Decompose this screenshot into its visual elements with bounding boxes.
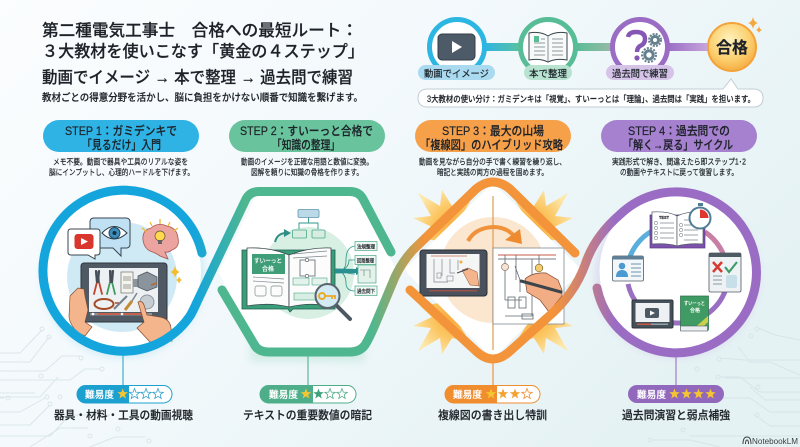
backdrop circle — [440, 217, 546, 323]
callout — [418, 79, 763, 107]
step 4 description: 実践形式で解き、間違えたら即ステップ1･2 — [612, 156, 746, 166]
badge step 4 — [628, 385, 724, 403]
icon: play speech bubble — [68, 229, 100, 259]
curved arrow — [468, 227, 522, 244]
step 4 heading: STEP 4：過去問での — [628, 123, 730, 138]
step descriptions — [49, 156, 746, 177]
tablet — [81, 263, 167, 322]
title block: 教材ごとの得意分野を活かし、脳に負担をかけない順番で知識を繋げます。 — [42, 91, 363, 104]
profile card — [612, 256, 644, 281]
label: past exams: 過去問で練習 — [612, 67, 668, 80]
step headings — [43, 120, 757, 152]
step 1 heading: STEP 1：ガミデンキで — [65, 123, 177, 138]
open book — [242, 248, 335, 312]
green textbook — [680, 296, 708, 331]
step 2 description: 図解を頼りに知識の骨格を作ります。 — [251, 167, 363, 177]
step 1 illustration — [67, 218, 182, 342]
badge step 2 — [260, 386, 356, 403]
step 3 description: 動画を見ながら自分の手で書く練習を繰り返し、 — [419, 156, 566, 166]
label: book — [524, 65, 572, 80]
step 3 heading: 「複線図」のハイブリッド攻略 — [420, 137, 563, 152]
tag tree: 回路整理 — [357, 258, 374, 264]
tablet drawing — [420, 250, 487, 296]
flow diagram — [292, 210, 325, 238]
badge step 1: 難易度 — [85, 388, 114, 401]
step 4 illustration — [612, 203, 741, 331]
green textbook: すいーっと — [684, 301, 705, 307]
test book: TEST — [659, 215, 669, 220]
tag tree: 法規整理 — [357, 244, 375, 250]
badge step 4: 難易度 — [637, 388, 666, 401]
open book: 合格 — [262, 265, 274, 273]
green textbook: 合格 — [690, 307, 700, 314]
ribbon: hexagon bottom into diamond top — [222, 182, 575, 352]
step 1 heading — [43, 120, 199, 152]
video tablet — [632, 300, 673, 328]
step 3 illustration — [420, 196, 564, 350]
step 2 heading — [229, 120, 385, 152]
icon: book — [520, 20, 576, 74]
step 1 description: メモ不要。動画で器具や工具のリアルな姿を — [53, 156, 188, 166]
answer card — [709, 253, 741, 292]
icon: sparkles — [170, 266, 182, 284]
difficulty badges — [77, 385, 724, 403]
title block: 動画でイメージ → 本で整理 → 過去問で練習 — [42, 68, 353, 87]
tag tree: 過去問下 — [357, 288, 375, 295]
connector bars — [484, 43, 711, 51]
step 2 heading: STEP 2：すいーっと合格で — [240, 123, 373, 138]
backdrop circle — [67, 222, 177, 332]
step 3 heading — [415, 120, 571, 152]
open book: すいーっと — [254, 258, 282, 265]
icon: eye speech bubble — [90, 218, 130, 256]
icon: sparkles — [748, 17, 762, 33]
step 3 description: 暗記と実践の両方の過程を固めます。 — [437, 167, 548, 177]
icon: question and gears — [612, 20, 668, 74]
title block — [42, 21, 364, 104]
caption step 3: 複線図の書き出し特訓 — [438, 408, 547, 422]
step 2 description — [241, 156, 373, 177]
label: video — [418, 65, 495, 80]
caption step 1: 器具・材料・工具の動画視聴 — [54, 408, 193, 422]
step 2 heading: 「知識の整理」 — [272, 137, 340, 152]
centre divider — [492, 196, 494, 350]
step 2 description: 動画のイメージを正確な用語と数値に変換。 — [241, 156, 373, 166]
step 3 description — [419, 156, 566, 177]
tag tree — [335, 242, 377, 296]
goal badge: 合格 — [716, 38, 748, 57]
backdrop circle — [262, 227, 354, 319]
curved arrow — [275, 229, 291, 242]
ribbon: diamond bottom into purple circle — [410, 192, 756, 359]
badge step 3 — [445, 386, 540, 403]
title block: ３大教材を使いこなす「黄金の４ステップ」 — [42, 42, 364, 61]
step 2 illustration — [242, 210, 377, 319]
label: video: 動画でイメージ — [424, 67, 489, 80]
circuit pattern bottom right — [648, 327, 800, 447]
right hand — [137, 301, 172, 342]
stems — [123, 355, 676, 386]
step 1 description — [49, 156, 194, 177]
step captions — [54, 408, 730, 422]
goal badge — [708, 23, 756, 71]
step 3 heading: STEP 3：最大の山場 — [442, 124, 544, 138]
soft glow under shapes — [41, 194, 759, 362]
label: past exams — [606, 65, 674, 80]
step 4 heading — [601, 120, 757, 152]
magnifier with key — [316, 284, 350, 319]
badge step 1 — [77, 386, 172, 403]
sun bursts behind step 3 — [413, 190, 573, 354]
NotebookLM mark: NotebookLM — [752, 437, 798, 446]
paper circuit — [493, 248, 564, 324]
circuit pattern bottom left — [0, 327, 151, 447]
step 4 heading: 「解く→戻る」サイクル — [623, 137, 733, 152]
tools on screen — [94, 271, 115, 294]
caption step 4: 過去問演習と弱点補強 — [622, 408, 730, 422]
title block: 第二種電気工事士 合格への最短ルート： — [42, 21, 358, 40]
icon: brain with bulb — [142, 219, 178, 259]
icon: stopwatch — [690, 203, 710, 228]
left hand — [69, 288, 92, 336]
white shape fills — [45, 190, 756, 352]
icon: video — [430, 20, 484, 74]
label: book: 本で整理 — [529, 67, 567, 80]
header roadmap — [418, 17, 763, 107]
badge step 2: 難易度 — [269, 388, 298, 401]
step 1 heading: 「見るだけ」入門 — [82, 137, 161, 152]
step 4 description — [612, 156, 746, 177]
ribbon: blue circle into hexagon top — [43, 190, 391, 351]
hand with pen — [521, 273, 562, 312]
step 1 description: 脳にインプットし、心理的ハードルを下げます。 — [49, 167, 194, 177]
badge step 3: 難易度 — [453, 388, 482, 401]
caption step 2: テキストの重要数値の暗記 — [243, 408, 372, 422]
cycle ring — [628, 231, 727, 323]
step 4 description: の動画やテキストに戻って復習します。 — [620, 167, 738, 177]
